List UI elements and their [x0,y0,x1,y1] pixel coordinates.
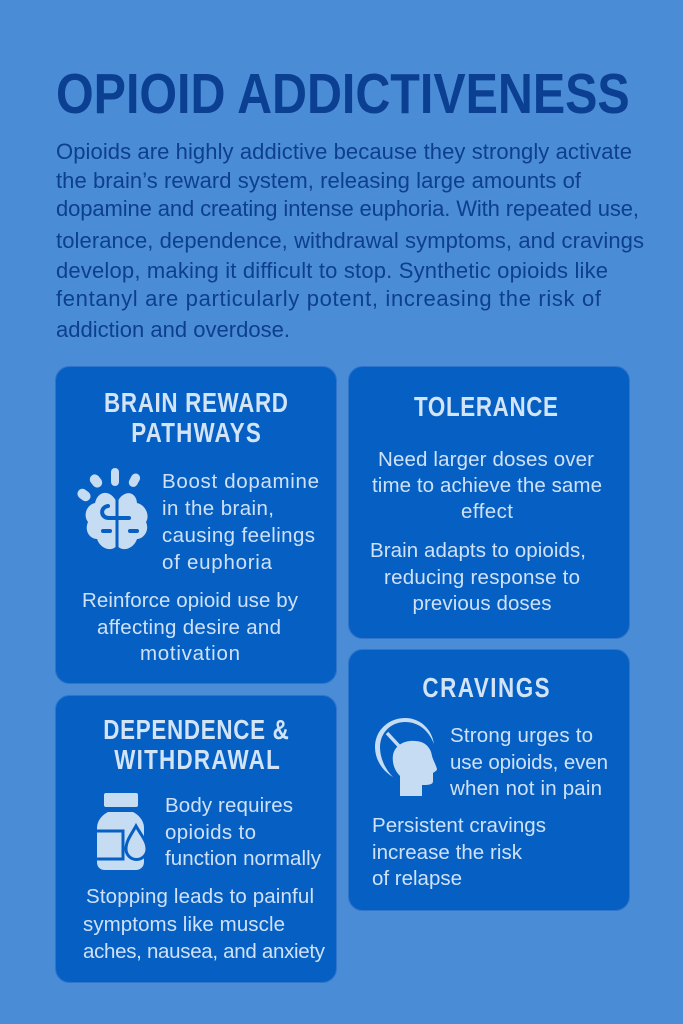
panel: cravings [348,650,630,910]
text: larger doses: time to achieve the same [372,474,602,497]
icon: medicine bottle [95,793,147,870]
intro paragraph: tolerance, dependence, withdrawal symptoms, and cravings [56,228,644,253]
title: OPIOID ADDICTIVENESS [56,62,630,126]
intro paragraph: the brain’s reward system, releasing large amounts of [56,168,582,193]
text: strong urges: Strong urges to [450,724,593,747]
text: persistent cravings: Persistent cravings [372,814,546,837]
text: body requires: function normally [165,847,322,870]
text: stopping: aches, nausea, and anxiety [83,940,326,963]
heading: dependence and withdrawal: WITHDRAWAL [114,745,280,776]
intro paragraph: develop, making it difficult to stop. Synthetic opioids like [56,258,608,283]
text: strong urges: use opioids, even [450,751,608,774]
text: larger doses: Need larger doses over [378,448,594,471]
text: persistent cravings: of relapse [372,867,462,890]
heading: brain reward pathways: PATHWAYS [131,418,261,449]
heading: dependence and withdrawal: DEPENDENCE & [103,715,289,746]
text: dopamine: Boost dopamine [162,470,319,493]
text: reinforce: affecting desire and [97,616,281,639]
text: dopamine: causing feelings [162,524,315,547]
text: body requires: opioids to [165,821,256,844]
intro paragraph: dopamine and creating intense euphoria. With repeated use, [56,196,639,221]
text: dopamine: of euphoria [162,551,273,574]
text: brain adapts: previous doses [412,592,552,615]
icon: head with prohibition sign [375,718,437,796]
text: persistent cravings [372,814,546,890]
text: body requires [165,794,322,870]
heading: cravings: CRAVINGS [422,673,550,704]
text: larger doses: effect [461,500,513,523]
text: brain adapts: Brain adapts to opioids, [370,539,586,562]
text: strong urges [449,724,608,800]
text: strong urges: when not in pain [449,777,602,800]
heading: brain reward pathways [104,388,288,449]
text: stopping [83,885,326,963]
text: body requires: Body requires [165,794,293,817]
text: persistent cravings: increase the risk [372,841,523,864]
panel: brain reward pathways [56,366,336,684]
text: reinforce [82,589,299,665]
text: larger doses [372,448,602,523]
text: reinforce: motivation [140,642,240,665]
heading: dependence and withdrawal [103,715,289,776]
heading: tolerance: TOLERANCE [414,392,558,423]
panel: dependence and withdrawal [56,696,336,982]
text: dopamine [162,470,319,574]
heading: brain reward pathways: BRAIN REWARD [104,388,288,419]
intro paragraph: Opioids are highly addictive because they strongly activate [56,139,632,164]
intro paragraph [56,139,644,342]
text: dopamine: in the brain, [162,497,274,520]
panel: tolerance [348,366,630,638]
text: stopping: Stopping leads to painful [86,885,314,908]
intro paragraph: fentanyl are particularly potent, increasing the risk of [56,286,602,311]
text: reinforce: Reinforce opioid use by [82,589,299,612]
icon: brain [75,468,148,549]
text: brain adapts: reducing response to [384,566,580,589]
intro paragraph: addiction and overdose. [56,317,290,342]
text: brain adapts [370,539,586,615]
text: stopping: symptoms like muscle [83,913,285,936]
